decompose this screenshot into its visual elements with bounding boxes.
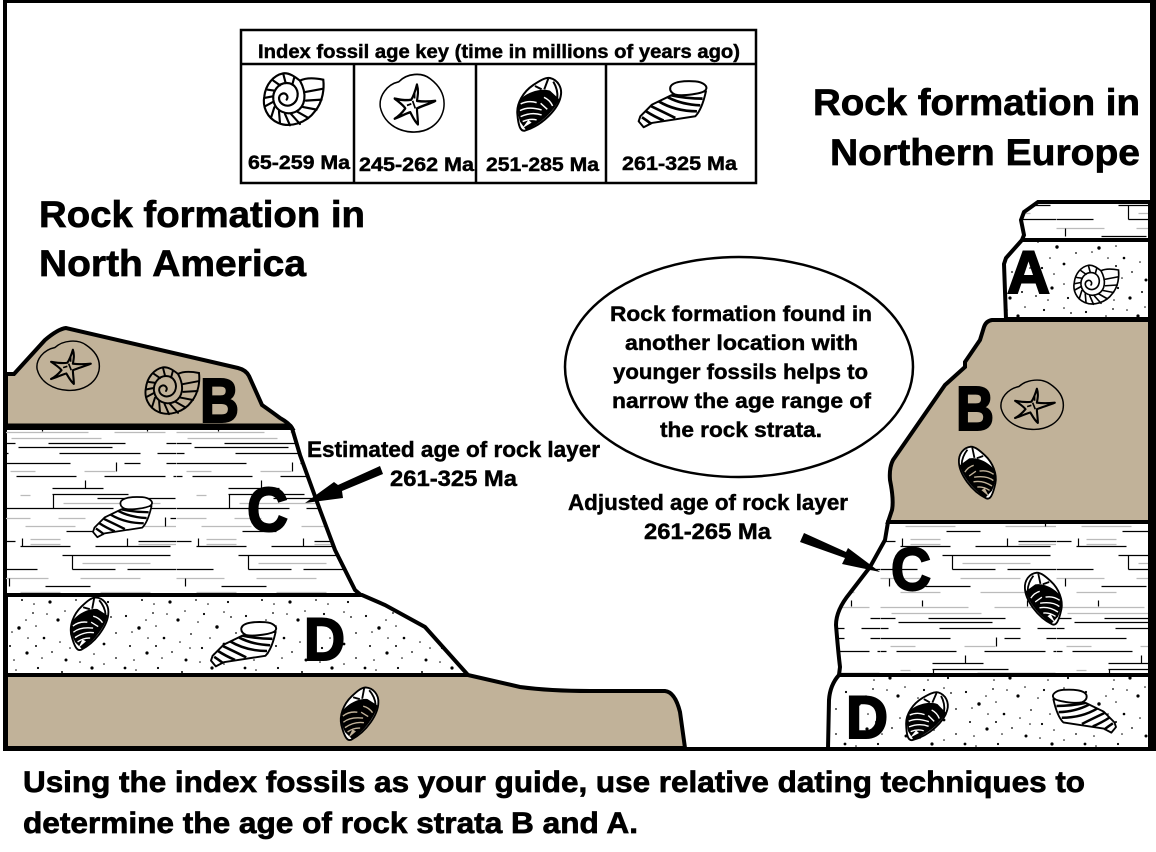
panel: index fossil age key	[241, 30, 756, 183]
callout: ellipse explanation	[565, 257, 913, 477]
letter B: B	[200, 367, 239, 436]
label: adjusted age: 261-265 Ma	[644, 519, 772, 544]
key table grid	[241, 30, 756, 183]
question text: Using the index fossils as your guide, use relative dating techniques to	[23, 766, 1085, 799]
heading: Northern Europe: Northern Europe	[830, 132, 1140, 173]
fossil: trilobite in layer D	[905, 691, 949, 742]
panel: North America rock formation	[6, 328, 685, 748]
fossil: horn coral in layer C	[93, 497, 152, 537]
icon: trilobite	[517, 78, 561, 131]
callout: ellipse explanation: narrow the age range of	[612, 390, 872, 413]
top limestone layer	[1021, 202, 1150, 240]
callout: ellipse explanation: the rock strata.	[660, 419, 822, 442]
bottom layer (tan)	[6, 675, 685, 748]
icon: star	[380, 74, 444, 132]
layer C (limestone)	[6, 426, 366, 597]
letter C: C	[891, 536, 931, 603]
callout: ellipse explanation: Rock formation found in	[610, 303, 872, 326]
fossil: trilobite in bottom layer	[336, 686, 384, 741]
fossil: trilobite in layer C	[1020, 571, 1066, 625]
right frame edge	[1150, 0, 1156, 751]
heading: Northern Europe: Rock formation in	[813, 82, 1140, 123]
letter B: B	[956, 375, 994, 444]
heading: North America: Rock formation in	[39, 194, 365, 235]
fossil: trilobite in layer B	[954, 445, 1000, 499]
age: ammonite: 65-259 Ma	[248, 153, 350, 174]
fossil: ammonite in layer B	[145, 367, 199, 414]
layer D (sandstone)	[828, 675, 1150, 749]
heading: North America: North America	[39, 243, 306, 284]
fossil: trilobite in layer D	[66, 596, 114, 651]
callout: ellipse explanation: another location with	[625, 332, 858, 355]
label: estimated age: Estimated age of rock layer	[307, 437, 600, 462]
fossil: star in layer B	[37, 341, 99, 390]
arrow: estimated age	[305, 466, 383, 503]
age: trilobite: 251-285 Ma	[486, 155, 599, 176]
icon: ammonite	[264, 73, 324, 125]
callout: ellipse explanation: younger fossils helps to	[613, 361, 868, 384]
layer C (limestone)	[836, 522, 1150, 675]
fossil: horn coral in layer D	[1053, 690, 1116, 733]
age: star: 245-262 Ma	[359, 155, 474, 176]
label: adjusted age: Adjusted age of rock layer	[568, 490, 848, 515]
age: horn coral: 261-325 Ma	[622, 154, 737, 175]
layer B (tan)	[6, 328, 292, 428]
layer A (sandstone)	[1004, 240, 1150, 319]
question text: determine the age of rock strata B and A.	[23, 807, 638, 840]
letter A: A	[1007, 239, 1050, 306]
fossil: horn coral in layer D	[211, 622, 276, 666]
letter C: C	[247, 476, 288, 545]
fossil: ammonite in layer A	[1074, 265, 1119, 304]
letter D: D	[846, 684, 888, 751]
key heading: Index fossil age key (time in millions of years ago)	[258, 42, 740, 63]
label: estimated age: 261-325 Ma	[390, 466, 518, 491]
layer D (sandstone)	[6, 595, 468, 675]
layer B (tan)	[888, 320, 1150, 522]
fossil: star in layer B	[1001, 380, 1063, 429]
arrow: adjusted age	[800, 533, 880, 572]
letter D: D	[304, 606, 345, 673]
icon: horn coral	[639, 81, 706, 127]
panel: Northern Europe rock formation	[828, 0, 1156, 751]
